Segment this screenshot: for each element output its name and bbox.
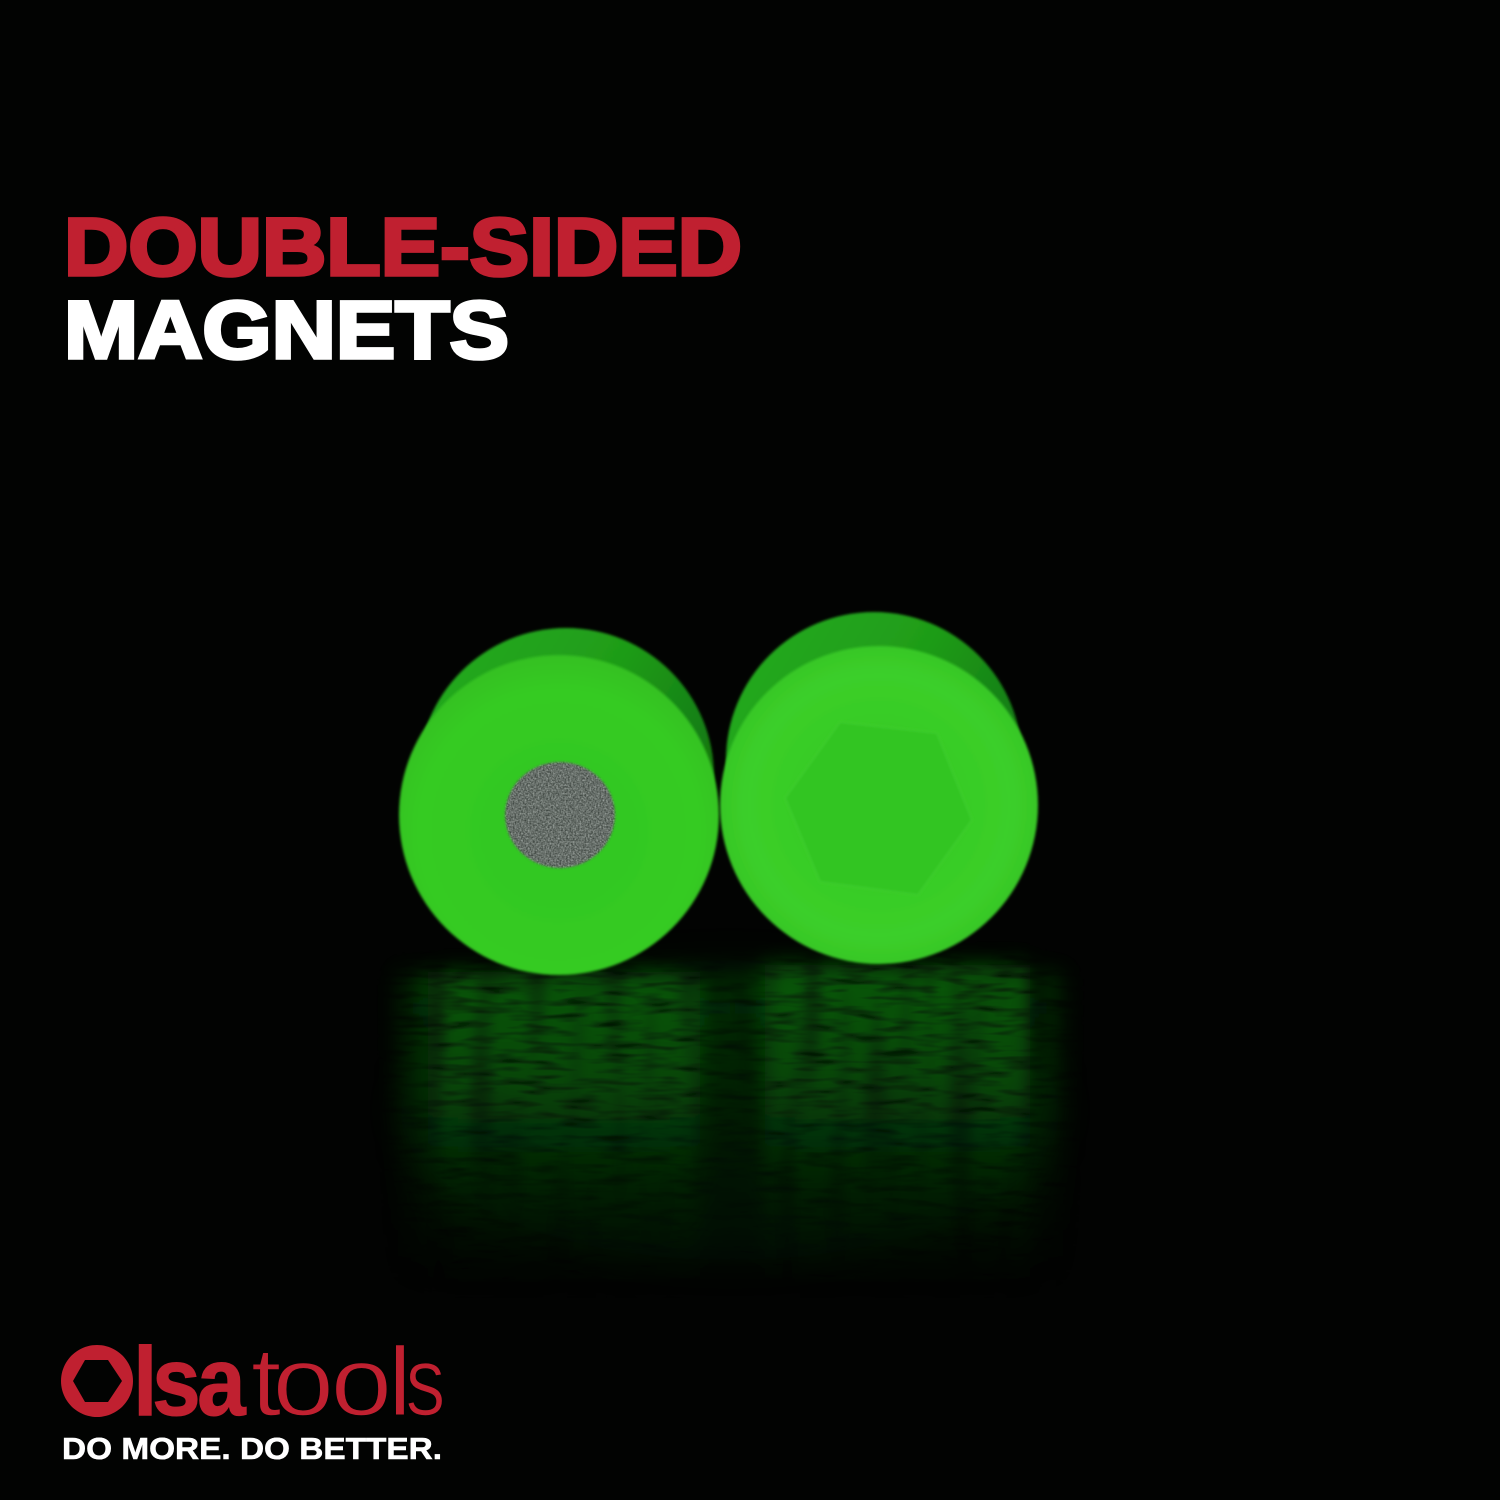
right magnet (hex socket side) [720, 612, 1038, 964]
hex socket [785, 722, 972, 895]
left magnet face [399, 655, 719, 975]
magnet disc [505, 762, 615, 868]
title line: magnets: MAGNETS [64, 285, 509, 376]
reflection of magnets on surface [398, 960, 1063, 1290]
left magnet body [418, 628, 714, 924]
tagline: DO MORE. DO BETTER. [62, 1431, 442, 1466]
left magnet (magnet side) [399, 628, 719, 975]
logo wordmark bold: lsa [133, 1327, 246, 1436]
logo wordmark light: tool [251, 1328, 412, 1436]
title [64, 202, 742, 376]
logo [61, 1327, 445, 1436]
right magnet body [726, 612, 1022, 908]
logo wordmark light: s [405, 1328, 445, 1436]
logo hexagon O mark [61, 1345, 133, 1417]
right magnet face [720, 646, 1038, 964]
title line: double-sided: DOUBLE-SIDED [64, 202, 742, 293]
